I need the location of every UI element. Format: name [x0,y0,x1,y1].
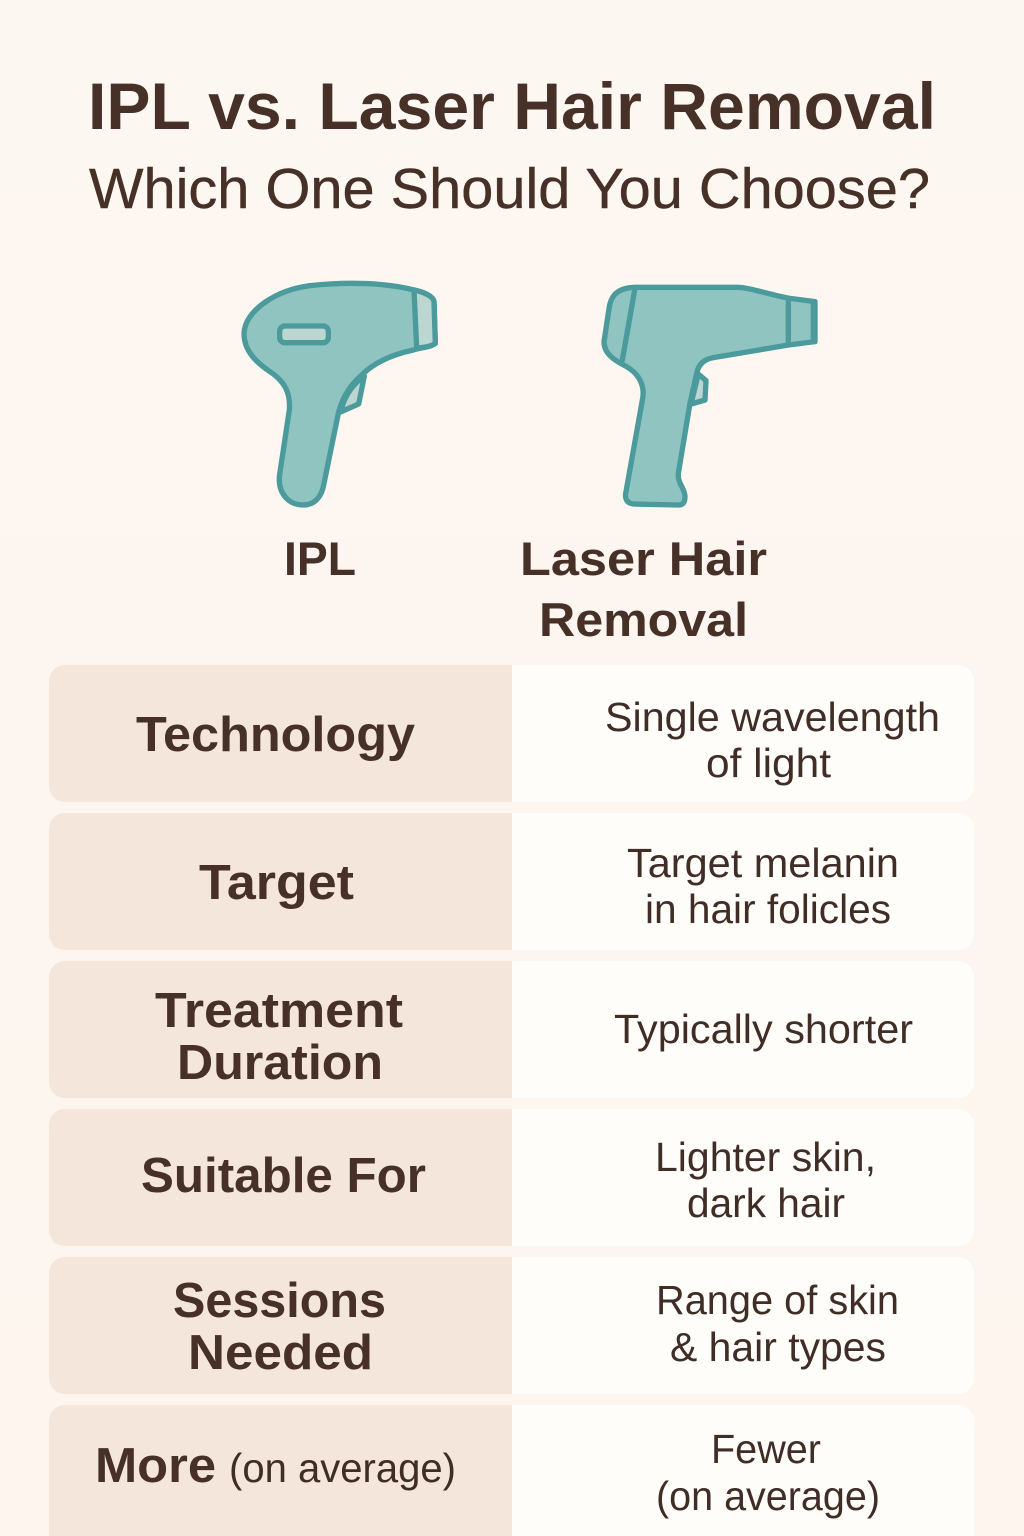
row: Technology: Technology [136,708,415,762]
row: Suitable For: dark hair [687,1180,845,1226]
row: Technology: Single wavelength [605,694,940,740]
row: Target: Target melanin [627,840,899,886]
icon: IPL handset [244,283,435,505]
row: Sessions Needed: & hair types [670,1324,886,1370]
icon: laser handset [604,287,815,505]
row: Suitable For: Lighter skin, [655,1134,876,1180]
title: IPL vs. Laser Hair Removal [88,69,936,143]
row: Sessions Needed: Sessions [173,1274,386,1328]
row: Treatment Duration: Treatment [155,984,403,1038]
row: More / Fewer [49,1405,974,1536]
row: Treatment Duration: Typically shorter [614,1006,913,1052]
row: More / Fewer: (on average) [229,1445,456,1491]
row: Sessions Needed: Range of skin [656,1277,899,1323]
label: Laser Hair Removal: Removal [539,593,748,646]
row: More / Fewer: (on average) [656,1473,880,1519]
row: Technology [49,665,974,802]
row: Suitable For [49,1109,974,1246]
row: More / Fewer: Fewer [711,1426,821,1472]
subtitle: Which One Should You Choose? [89,157,930,221]
row: Suitable For: Suitable For [141,1149,426,1203]
row: Treatment Duration [49,961,974,1098]
row: Treatment Duration: Duration [177,1036,383,1090]
label: Laser Hair Removal [520,532,767,646]
row: Sessions Needed [49,1257,974,1394]
row: Target: in hair folicles [645,886,891,932]
row: More / Fewer: More [95,1439,216,1493]
row: Target: Target [199,856,354,910]
row: Technology: of light [706,740,832,786]
row: Target [49,813,974,950]
label: IPL: IPL [284,532,356,585]
label: Laser Hair Removal: Laser Hair [520,532,767,585]
row: Sessions Needed: Needed [188,1326,373,1380]
